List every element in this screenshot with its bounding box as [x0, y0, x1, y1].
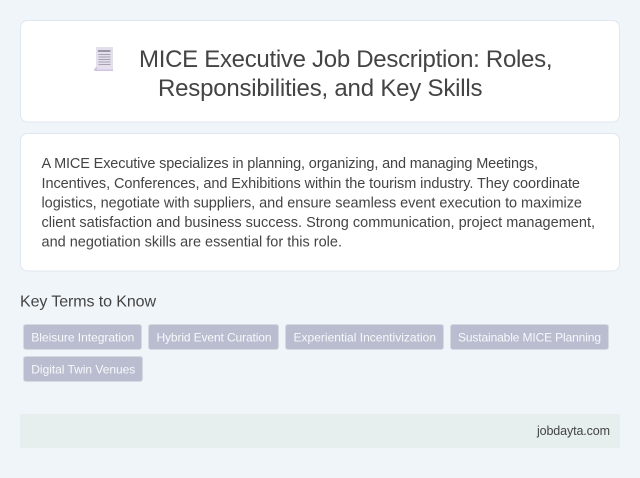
footer text: source: jobdayta.com — [536, 424, 610, 438]
title: Responsibilities, and Key Skills — [158, 75, 482, 102]
text block: description — [42, 156, 595, 250]
text block: description: and negotiation skills are essential for this role. — [42, 234, 342, 250]
tag: Sustainable MICE Planning — [450, 324, 608, 350]
tag: Sustainable MICE Planning: Sustainable MICE Planning — [458, 330, 601, 344]
text block: description: Incentives, Conferences, and Exhibitions within the tourism industry. They coordinate — [42, 176, 580, 192]
tag: Bleisure Integration: Bleisure Integration — [31, 330, 134, 344]
title — [139, 46, 552, 102]
icon: document scroll — [94, 47, 113, 71]
text block: description: client satisfaction and business success. Strong communication, project management, — [42, 215, 595, 231]
text block: description: A MICE Executive specializes in planning, organizing, and managing Meetings, — [42, 156, 538, 172]
text block: description: logistics, negotiate with suppliers, and ensure seamless event execution to maximize — [42, 196, 582, 212]
panel: title card — [20, 20, 620, 122]
tag: Digital Twin Venues — [24, 356, 142, 382]
tag: Experiential Incentivization: Experiential Incentivization — [294, 330, 436, 344]
heading: key terms: Key Terms to Know — [20, 294, 156, 310]
footer bar — [20, 414, 620, 448]
title: MICE Executive Job Description: Roles, — [139, 46, 552, 73]
tag: Hybrid Event Curation: Hybrid Event Curation — [156, 330, 272, 344]
panel: description card — [20, 134, 620, 271]
tag: Experiential Incentivization — [286, 324, 444, 350]
tag: Hybrid Event Curation — [148, 324, 278, 350]
tag: Bleisure Integration — [24, 324, 142, 350]
tag: Digital Twin Venues: Digital Twin Venues — [31, 362, 135, 376]
